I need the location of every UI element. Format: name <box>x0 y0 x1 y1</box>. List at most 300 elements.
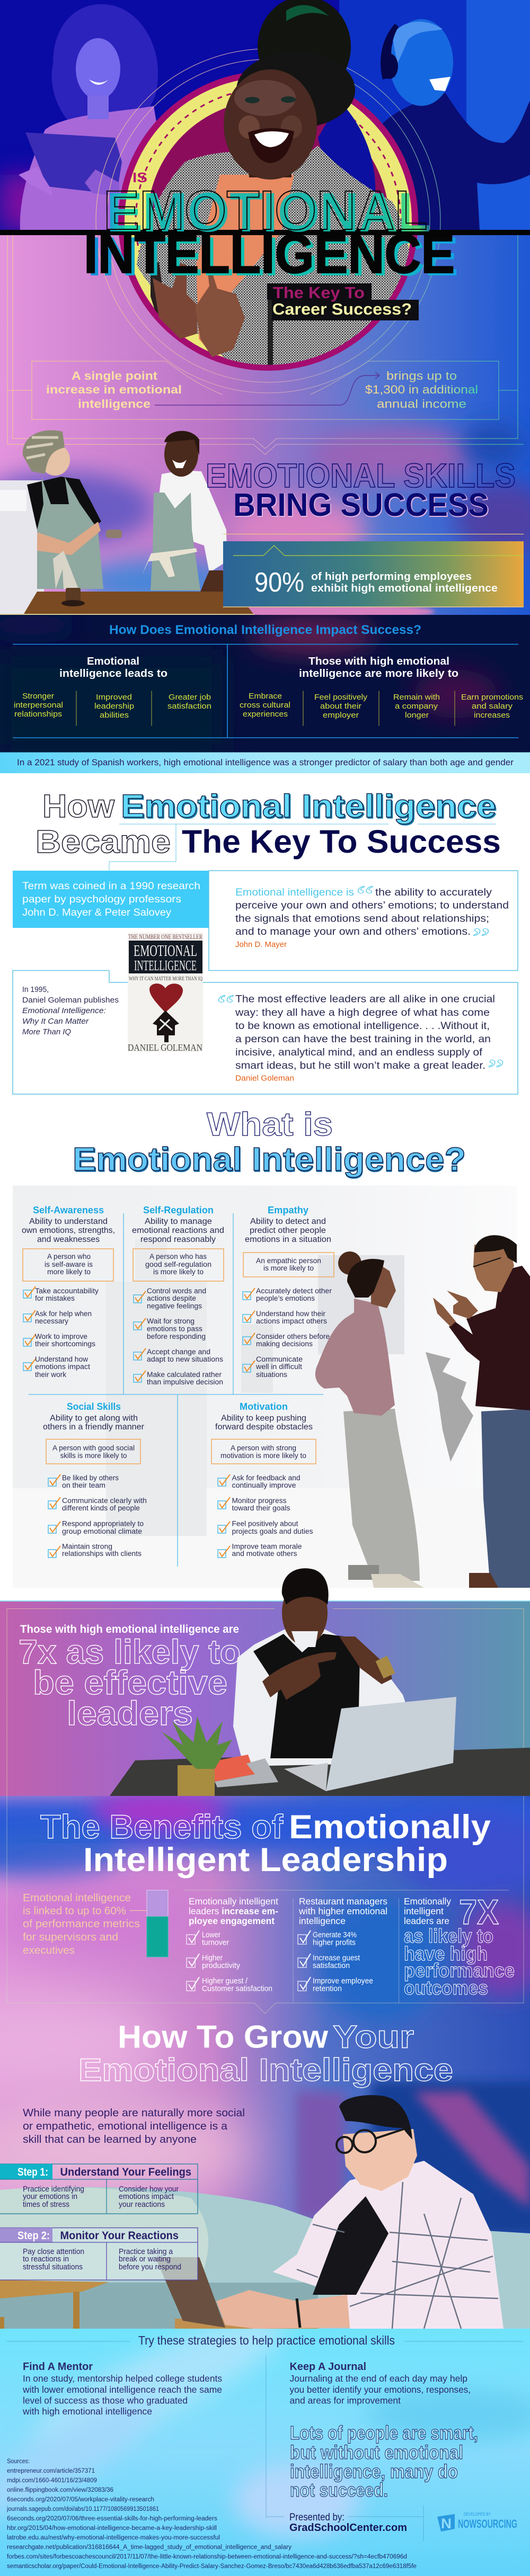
hero background <box>0 0 530 230</box>
text: intro: or empathetic, emotional intelligence is a <box>23 2121 228 2132</box>
stat: up to 60 percent with bar: Emotional intelligence <box>23 1892 131 1904</box>
list: self-regulation behaviours: negative feelings <box>147 1302 202 1310</box>
column: restaurant managers: Improve employee <box>313 1977 373 1985</box>
list: empathy behaviours: making decisions <box>256 1340 313 1348</box>
list: self-awareness behaviours: their shortcomings <box>35 1340 95 1348</box>
list: social skills behaviours: Be liked by others <box>62 1474 119 1482</box>
text: keep a journal: Keep A Journal <box>289 2361 366 2373</box>
footer: strategies: Try these strategies to help practice emotional skills <box>138 2333 395 2347</box>
heading: benefits of emotionally intelligent leadership: Emotionally <box>289 1809 491 1846</box>
panel: step 1: Step 1: <box>17 2166 48 2178</box>
title: Is Emotional Intelligence: EMOTIONAL <box>103 180 428 241</box>
heading: Emotional Skills Bring Success: BRING SUCCESS <box>233 487 489 523</box>
book cover: INTELLIGENCE <box>134 958 197 973</box>
quote: lots of people are smart: intelligence, many do <box>290 2461 458 2482</box>
list: outcomes: relationships <box>14 710 62 719</box>
list: outcomes: Embrace <box>249 692 282 701</box>
quote: lots of people are smart: not succeed. <box>290 2479 388 2501</box>
panel: Empathy: predict other people <box>250 1226 326 1235</box>
column: restaurant managers: intelligence <box>299 1916 346 1926</box>
stat: up to 60 percent with bar: executives <box>23 1945 75 1956</box>
quote: lots of people are smart <box>290 2422 478 2501</box>
list: outcomes: Remain with <box>393 693 440 702</box>
panel: step 2: Step 2: <box>17 2230 50 2242</box>
purple section background <box>0 1600 530 1796</box>
list: social skills behaviours <box>48 1474 147 1558</box>
list: self-regulation behaviours: emotions to pass <box>147 1325 202 1333</box>
book cover: EMOTIONAL <box>134 941 197 960</box>
list: empathy behaviours: Communicate <box>256 1355 303 1363</box>
heading: How to grow your emotional intelligence: How To Grow <box>118 2019 328 2055</box>
list: self-regulation behaviours: than impulsive decision <box>147 1378 223 1386</box>
list: motivation behaviours: continually improve <box>232 1481 296 1489</box>
sources: 6seconds.org/2020/07/06/three-essential-skills-for-high-performing-leaders <box>7 2516 217 2522</box>
panel: Self-Regulation: Ability to manage <box>145 1217 212 1226</box>
sources: latrobe.edu.au/nest/why-emotional-intelligence-makes-you-more-successful <box>7 2535 220 2541</box>
panel: Motivation: motivation is more likely to <box>220 1452 306 1460</box>
text: find a mentor: with high emotional intelligence <box>22 2406 152 2417</box>
text: intro: skill that can be learned by anyone <box>23 2134 197 2145</box>
panel: Daniel Goleman: incisive, analytical mind, and an endless supply of <box>235 1047 483 1058</box>
column: increase employee engagement: Higher guest / <box>202 1977 248 1985</box>
panel: Self-Regulation <box>132 1205 224 1386</box>
list: self-awareness behaviours: Understand how <box>35 1355 88 1363</box>
panel: term coined 1990: Term was coined in a 1990 research <box>22 881 200 892</box>
logo: NowSourcing: N <box>441 2516 452 2532</box>
panel: Daniel Goleman: smart ideas, but he still won’t make a great leader. <box>235 1060 485 1071</box>
text: find a mentor <box>22 2361 222 2417</box>
panel: Self-Awareness: own emotions, strengths, <box>22 1226 115 1235</box>
list: self-awareness behaviours: necessary <box>35 1317 68 1325</box>
photo: man with headphones <box>378 19 530 230</box>
sources: 6seconds.org/2020/07/05/workplace-vitality-research <box>7 2497 154 2503</box>
heading: how EI became the key to success: Emotional Intelligence <box>121 788 496 824</box>
sources: forbes.com/sites/forbescoachescouncil/2017/11/07/the-little-known-relationship-between-emotional-intelligence-and-success/?sh=4ecfb470696d <box>7 2554 407 2560</box>
list: self-regulation behaviours: Accept change and <box>147 1348 210 1356</box>
list: social skills behaviours: Communicate clearly with <box>62 1497 147 1505</box>
icon: open quote: “ <box>217 990 235 1020</box>
panel: Social Skills: Social Skills <box>67 1401 121 1412</box>
column: restaurant managers <box>298 1896 387 1993</box>
panel: step 2: before you respond <box>119 2263 181 2271</box>
panel: Self-Awareness: Self-Awareness <box>33 1205 104 1215</box>
footer: strategies <box>7 2333 523 2541</box>
heading: What is Emotional Intelligence?: Emotional Intelligence? <box>74 1142 466 1179</box>
dark panel background <box>0 614 530 753</box>
presented by <box>289 2512 407 2534</box>
text: emotional intelligence leads to: Emotional <box>87 656 139 667</box>
list: social skills behaviours: group emotional climate <box>62 1527 142 1535</box>
sources: mdpi.com/1660-4601/16/23/4809 <box>7 2477 97 2484</box>
panel: Empathy <box>243 1205 334 1379</box>
list: social skills behaviours: Respond appropriately to <box>62 1520 144 1528</box>
column: restaurant managers: higher profits <box>313 1938 356 1947</box>
panel: Daniel Goleman <box>13 970 518 1094</box>
column: increase employee engagement <box>187 1896 278 1993</box>
presented by: GradSchoolCenter.com <box>289 2522 407 2534</box>
frame: benefits <box>7 1796 524 2014</box>
callout: single point brings up to $1,300 <box>7 361 518 419</box>
panel: John Mayer quote: Emotional intelligence is <box>235 887 354 898</box>
list: outcomes: employer <box>323 711 359 720</box>
panel: Social Skills: skills is more likely to <box>60 1452 127 1460</box>
icon: close quote: ” <box>472 923 490 953</box>
panel: Daniel Goleman: Why It Can Matter <box>22 1017 89 1026</box>
quote: lots of people are smart: Lots of people are smart, <box>290 2422 478 2444</box>
panel: Daniel Goleman: Emotional Intelligence: <box>22 1007 106 1015</box>
panel: step 1: times of stress <box>23 2201 69 2209</box>
panel: Self-Awareness <box>22 1205 115 1379</box>
list: empathy behaviours: Accurately detect other <box>256 1287 332 1295</box>
panel: Empathy: Empathy <box>268 1205 308 1215</box>
text: find a mentor: In one study, mentorship helped college students <box>23 2373 222 2384</box>
photo: two colleagues talking <box>315 1235 530 1588</box>
title: Is Emotional Intelligence: INTELLIGENCE <box>84 223 455 285</box>
list: self-awareness behaviours: emotions impact <box>35 1363 90 1371</box>
list: outcomes: abilities <box>100 711 129 720</box>
list: outcomes: Improved <box>96 693 132 702</box>
column: 7x high performance: outcomes <box>404 1977 488 1999</box>
sources: online.flippingbook.com/view/32083/36 <box>7 2487 113 2493</box>
callout: single point brings up to $1,300: A single point <box>72 369 158 382</box>
panel: Self-Awareness: and weaknesses <box>37 1235 100 1244</box>
panel: Motivation: Ability to keep pushing <box>221 1414 306 1423</box>
panel: step 2: Monitor Your Reactions <box>60 2230 179 2242</box>
text: emotional intelligence leads to: intelligence leads to <box>59 668 167 679</box>
photo: man at laptop <box>110 1568 530 1796</box>
photo: woman with tablet <box>19 4 159 230</box>
heading: What is Emotional Intelligence?: Emotional Intelligence? <box>73 1141 466 1178</box>
list: outcomes: Earn promotions <box>461 693 523 702</box>
bottom gradient background <box>0 235 530 620</box>
list: motivation behaviours: Ask for feedback and <box>232 1474 300 1482</box>
brush gradient background <box>0 1796 530 2233</box>
sources: semanticscholar.org/paper/Could-Emotional-Intelligence-Ability-Predict-Salary-Sanchez-Gomez-Breso/bc7430ea6d428b636edfba537a12c69e6318f5fe <box>7 2563 417 2570</box>
panel: John Mayer quote <box>209 871 518 970</box>
title: Is Emotional Intelligence <box>84 169 458 288</box>
presented by: Presented by: <box>289 2512 344 2523</box>
list: self-regulation behaviours: adapt to new situations <box>147 1355 223 1363</box>
stat box: 90 percent: exhibit high emotional intelligence <box>311 583 498 594</box>
list: self-awareness behaviours: Work to improve <box>35 1332 87 1340</box>
text: keep a journal: you better identify your emotions, responses, <box>289 2384 471 2395</box>
column dividers <box>29 1213 323 1567</box>
list: empathy behaviours: actions impact others <box>256 1317 327 1325</box>
panel: Empathy: is more likely to <box>263 1264 314 1272</box>
heading: how EI became the key to success: The Key To Success <box>182 824 501 860</box>
panel: how does EI impact success: How Does Emotional Intelligence Impact Success? <box>109 623 421 637</box>
list: outcomes: Greater job <box>169 693 211 702</box>
panel background with ghosted office <box>13 1185 530 1588</box>
panel: step 1: Understand Your Feelings <box>60 2166 191 2178</box>
text: keep a journal: and areas for improvement <box>289 2395 401 2406</box>
panel: step 1: Consider how your <box>119 2185 179 2194</box>
panel: Self-Awareness: Ability to understand <box>29 1217 108 1226</box>
subtitle: The Key To Career Success: The Key To <box>273 283 365 302</box>
stat box: 90 percent: 90% <box>254 567 304 598</box>
panel: Daniel Goleman: Daniel Goleman <box>235 1074 294 1083</box>
column: restaurant managers: Generate 34% <box>313 1931 357 1939</box>
list: social skills behaviours: on their team <box>62 1481 105 1489</box>
sources: Sources: <box>7 2458 30 2465</box>
badge circle <box>96 49 440 393</box>
sources: entrepreneur.com/article/357371 <box>7 2468 95 2474</box>
list: self-regulation behaviours: Control words and <box>147 1287 206 1295</box>
list: self-regulation behaviours: actions despite <box>147 1294 196 1302</box>
heading: how EI became the key to success <box>36 788 501 871</box>
heading: how EI became the key to success: How <box>42 788 115 824</box>
panel: Social Skills: A person with good social <box>52 1444 135 1452</box>
list: social skills behaviours: different kinds of people <box>62 1504 140 1512</box>
heading: benefits of emotionally intelligent leadership <box>40 1809 491 1879</box>
list: self-awareness behaviours <box>23 1286 99 1379</box>
column: increase employee engagement: ployee engagement <box>189 1916 275 1926</box>
panel: Self-Regulation: respond reasonably <box>140 1235 216 1244</box>
panel: Self-Awareness: is self-aware is <box>45 1260 93 1268</box>
text: keep a journal: Journaling at the end of each day may help <box>289 2373 467 2384</box>
list: empathy behaviours <box>243 1287 332 1379</box>
text: emotional intelligence leads to <box>59 656 458 679</box>
list: outcomes: leadership <box>94 702 134 711</box>
list: outcomes: interpersonal <box>14 701 63 710</box>
panel: Daniel Goleman: The most effective leaders are all alike in one crucial <box>235 994 495 1005</box>
text: 7x as likely to be effective leaders <box>19 1623 241 1732</box>
panel: John Mayer quote: John D. Mayer <box>235 940 287 949</box>
panel: Self-Regulation: Self-Regulation <box>143 1205 214 1215</box>
book cover <box>128 933 203 1053</box>
column: 7x high performance: leaders are <box>404 1916 449 1926</box>
subtitle: The Key To Career Success: Career Success? <box>272 300 412 318</box>
column: restaurant managers: retention <box>313 1985 342 1993</box>
panel: step 1: your reactions <box>119 2201 165 2209</box>
panel: Social Skills <box>43 1401 147 1558</box>
column: 7x high performance: have high <box>404 1943 488 1965</box>
heading: What is Emotional Intelligence?: What is <box>207 1106 333 1143</box>
heading: benefits of emotionally intelligent leadership: Intelligent Leadership <box>83 1841 448 1879</box>
panel: Motivation <box>211 1401 316 1558</box>
panel: step 2: break or waiting <box>119 2255 171 2264</box>
list: outcomes: increases <box>474 711 510 720</box>
panel: Empathy: An empathic person <box>256 1257 321 1265</box>
text: find a mentor: level of success as those who graduated <box>23 2395 188 2406</box>
icon: close quote: ” <box>488 1054 505 1085</box>
list: outcomes: about their <box>320 702 361 711</box>
cyan footer background <box>0 2329 530 2576</box>
logo: NowSourcing <box>437 2512 517 2532</box>
photo: person typing <box>216 2095 504 2329</box>
list: self-regulation behaviours: Make calculated rather <box>147 1371 222 1379</box>
photo: two baristas <box>0 430 254 615</box>
callout: single point brings up to $1,300: increase in emotional <box>46 383 182 396</box>
column: 7x high performance: performance <box>404 1960 515 1981</box>
heading: Emotional Skills Bring Success: BRING SUCCESS <box>234 487 489 523</box>
photo: room background <box>0 2187 530 2329</box>
list: social skills behaviours: relationships with clients <box>62 1550 142 1558</box>
text: emotional intelligence leads to: Those with high emotional <box>308 656 449 667</box>
list: outcomes: Feel positively <box>314 693 368 702</box>
text: 7x as likely to be effective leaders: 7x as likely to <box>19 1633 241 1671</box>
heading: benefits of emotionally intelligent leadership: The Benefits of <box>40 1809 284 1846</box>
cyan bar: 2021 Spanish study: In a 2021 study of Spanish workers, high emotional intelligence was a stronger predictor of salary than both age and gender <box>17 758 514 767</box>
panel: Self-Awareness: more likely to <box>47 1268 91 1276</box>
list: outcomes: Stronger <box>22 692 54 701</box>
panel: John Mayer quote: and to manage your own and others’ emotions. <box>235 926 471 937</box>
column: increase employee engagement: turnover <box>202 1938 229 1947</box>
stat box: 90 percent: of high performing employees <box>311 571 472 583</box>
callout: single point brings up to $1,300: brings up to <box>386 369 457 382</box>
column: 7x high performance: Emotionally <box>404 1896 451 1907</box>
panel: Daniel Goleman: to be known as emotional intelligence. . . .Without it, <box>235 1021 490 1032</box>
panel: Motivation: Motivation <box>240 1401 288 1412</box>
list: empathy behaviours: situations <box>256 1371 287 1379</box>
panel: term coined 1990: paper by psychology professors <box>22 894 181 905</box>
book cover: WHY IT CAN MATTER MORE THAN IQ <box>129 976 202 982</box>
column: increase employee engagement: productivity <box>202 1962 241 1970</box>
panel: step 2: to reactions in <box>23 2255 69 2264</box>
column: increase employee engagement: Higher <box>202 1954 223 1963</box>
sources <box>6 2458 417 2570</box>
panel: John Mayer quote: the ability to accurately <box>375 887 492 898</box>
cyan bar: 2021 Spanish study <box>0 752 530 773</box>
panel: Empathy: emotions in a situation <box>245 1235 331 1244</box>
column dividers <box>293 1899 399 2003</box>
heading: Emotional Skills Bring Success: EMOTIONAL SKILLS <box>206 457 516 495</box>
list: motivation behaviours: Improve team morale <box>232 1542 302 1551</box>
list: outcomes: and salary <box>472 702 513 711</box>
panel: Motivation: forward despite obstacles <box>215 1423 313 1432</box>
column: restaurant managers: Increase guest <box>313 1954 360 1963</box>
column: increase employee engagement: Lower <box>202 1931 220 1939</box>
frame: purple section <box>7 1609 524 1796</box>
text: emotional intelligence leads to: intelligence are more likely to <box>299 668 458 679</box>
column: increase employee engagement: Emotionally intelligent <box>189 1896 278 1907</box>
panel: step 2: Pay close attention <box>23 2248 84 2256</box>
column: increase employee engagement: leaders increase em- <box>189 1906 278 1916</box>
panel: how does EI impact success <box>13 623 523 738</box>
chevron frame divider <box>7 235 524 454</box>
panel: Daniel Goleman: a person can have the best training in the world, an <box>235 1034 491 1045</box>
panel: step 1: your emotions in <box>23 2193 77 2201</box>
title: Is Emotional Intelligence: EMOTIONAL <box>107 182 431 244</box>
list: empathy behaviours: Understand how their <box>256 1310 326 1318</box>
text: keep a journal <box>289 2361 471 2406</box>
list: self-regulation behaviours: Wait for strong <box>147 1317 195 1325</box>
list: social skills behaviours: Maintain strong <box>62 1542 112 1551</box>
column: restaurant managers: Restaurant managers <box>299 1896 387 1907</box>
panel: step 1 <box>0 2164 198 2214</box>
quote: lots of people are smart: but without emotional <box>290 2441 463 2463</box>
panel: John Mayer quote: perceive your own and others’ emotions; to understand <box>235 900 509 911</box>
callout: single point brings up to $1,300: $1,300 in additional <box>365 383 478 396</box>
photo: smiling woman in houndstooth jacket <box>137 0 412 371</box>
list: outcomes: experiences <box>243 710 288 719</box>
panel: step 2: Practice taking a <box>119 2248 173 2256</box>
text: intro: While many people are naturally more social <box>23 2107 245 2119</box>
heading: how EI became the key to success: Emotional Intelligence <box>122 789 497 825</box>
panel: Self-Regulation: good self-regulation <box>145 1260 211 1268</box>
title: Is Emotional Intelligence: INTELLIGENCE <box>87 226 458 288</box>
list: self-awareness behaviours: Take accountability <box>35 1287 99 1295</box>
panel: step 1: Practice identifying <box>23 2185 84 2194</box>
panel: Self-Regulation: emotional reactions and <box>132 1226 224 1235</box>
panel: Daniel Goleman: In 1995, <box>22 986 49 994</box>
stat: up to 60 percent with bar: is linked to up to 60% <box>23 1906 126 1917</box>
column: restaurant managers: satisfaction <box>313 1962 350 1970</box>
list: empathy behaviours: Consider others before <box>256 1332 330 1340</box>
list: outcomes: a company <box>395 702 438 711</box>
heading: How to grow your emotional intelligence <box>78 2019 453 2088</box>
heading: Emotional Skills Bring Success <box>206 457 516 523</box>
callout: single point brings up to $1,300: intelligence <box>78 397 151 410</box>
icon: open quote: “ <box>356 881 374 911</box>
panel: Daniel Goleman: More Than IQ <box>22 1028 71 1036</box>
heading: How to grow your emotional intelligence: Emotional Intelligence <box>78 2052 453 2088</box>
panel: Self-Regulation: is more likely to <box>153 1268 204 1276</box>
panel: step 2: stressful situations <box>23 2263 83 2271</box>
list: empathy behaviours: people’s emotions <box>256 1294 315 1302</box>
list: outcomes <box>14 692 523 720</box>
panel: Daniel Goleman: way: they all have a high degree of what has come <box>235 1007 490 1018</box>
panel: step 1: emotions impact <box>119 2193 174 2201</box>
title: Is Emotional Intelligence: IS <box>132 169 147 185</box>
list: outcomes: cross cultural <box>240 701 290 710</box>
list: self-regulation behaviours: before responding <box>147 1332 206 1340</box>
stat: up to 60 percent with bar <box>23 1890 168 1957</box>
heading: What is Emotional Intelligence? <box>73 1106 466 1179</box>
sources: journals.sagepub.com/doi/abs/10.1177/1080569913501861 <box>6 2506 159 2512</box>
logo: NowSourcing: DEVELOPED BY <box>464 2512 491 2517</box>
text: 7x as likely to be effective leaders: be effective <box>33 1663 227 1702</box>
column: increase employee engagement: Customer satisfaction <box>202 1985 272 1993</box>
list: self-awareness behaviours: their work <box>35 1371 66 1379</box>
book cover: DANIEL GOLEMAN <box>128 1042 202 1053</box>
black bar <box>0 230 530 235</box>
book cover: THE NUMBER ONE BESTSELLER <box>128 933 202 941</box>
subtitle: The Key To Career Success <box>267 283 419 320</box>
text: intro <box>23 2107 245 2145</box>
panel: step 2 <box>0 2228 198 2280</box>
list: outcomes: longer <box>405 711 429 720</box>
list: self-awareness behaviours: for mistakes <box>35 1294 75 1302</box>
list: motivation behaviours: Feel positively about <box>232 1520 298 1528</box>
sources: researchgate.net/publication/316816644_A_time-lagged_study_of_emotional_intelligence_and_salary <box>7 2544 292 2551</box>
panel: term coined 1990 <box>13 871 209 928</box>
panel: Empathy: Ability to detect and <box>250 1217 326 1226</box>
sources: hbr.org/2015/04/how-emotional-intelligence-became-a-key-leadership-skill <box>7 2525 217 2532</box>
list: motivation behaviours: toward their goals <box>232 1504 290 1512</box>
column: restaurant managers: with higher emotional <box>298 1906 387 1916</box>
panel: term coined 1990: John D. Mayer & Peter Salovey <box>22 907 172 918</box>
heading: How to grow your emotional intelligence: Your <box>333 2019 414 2055</box>
panel: Daniel Goleman: Daniel Goleman publishes <box>22 996 119 1005</box>
panel: Social Skills: Ability to get along with <box>50 1414 138 1423</box>
text: find a mentor: Find A Mentor <box>23 2361 93 2373</box>
list: motivation behaviours: projects goals and duties <box>232 1527 313 1535</box>
stat: up to 60 percent with bar: for supervisors and <box>23 1931 118 1943</box>
list: outcomes: satisfaction <box>167 702 211 711</box>
panel: Self-Regulation: A person who has <box>149 1253 207 1260</box>
panel: John Mayer quote: the signals that emotions send about relationships; <box>235 913 489 925</box>
list: self-regulation behaviours <box>134 1287 223 1386</box>
callout: single point brings up to $1,300: annual income <box>377 397 466 410</box>
text: 7x as likely to be effective leaders: leaders <box>67 1694 193 1732</box>
list: motivation behaviours: Monitor progress <box>232 1497 287 1505</box>
list: motivation behaviours: and motivate others <box>232 1550 297 1558</box>
heading: how EI became the key to success: Became <box>36 824 171 860</box>
panel: Self-Awareness: A person who <box>47 1253 91 1260</box>
stat: up to 60 percent with bar: of performance metrics <box>23 1918 140 1930</box>
list: motivation behaviours <box>218 1474 313 1558</box>
